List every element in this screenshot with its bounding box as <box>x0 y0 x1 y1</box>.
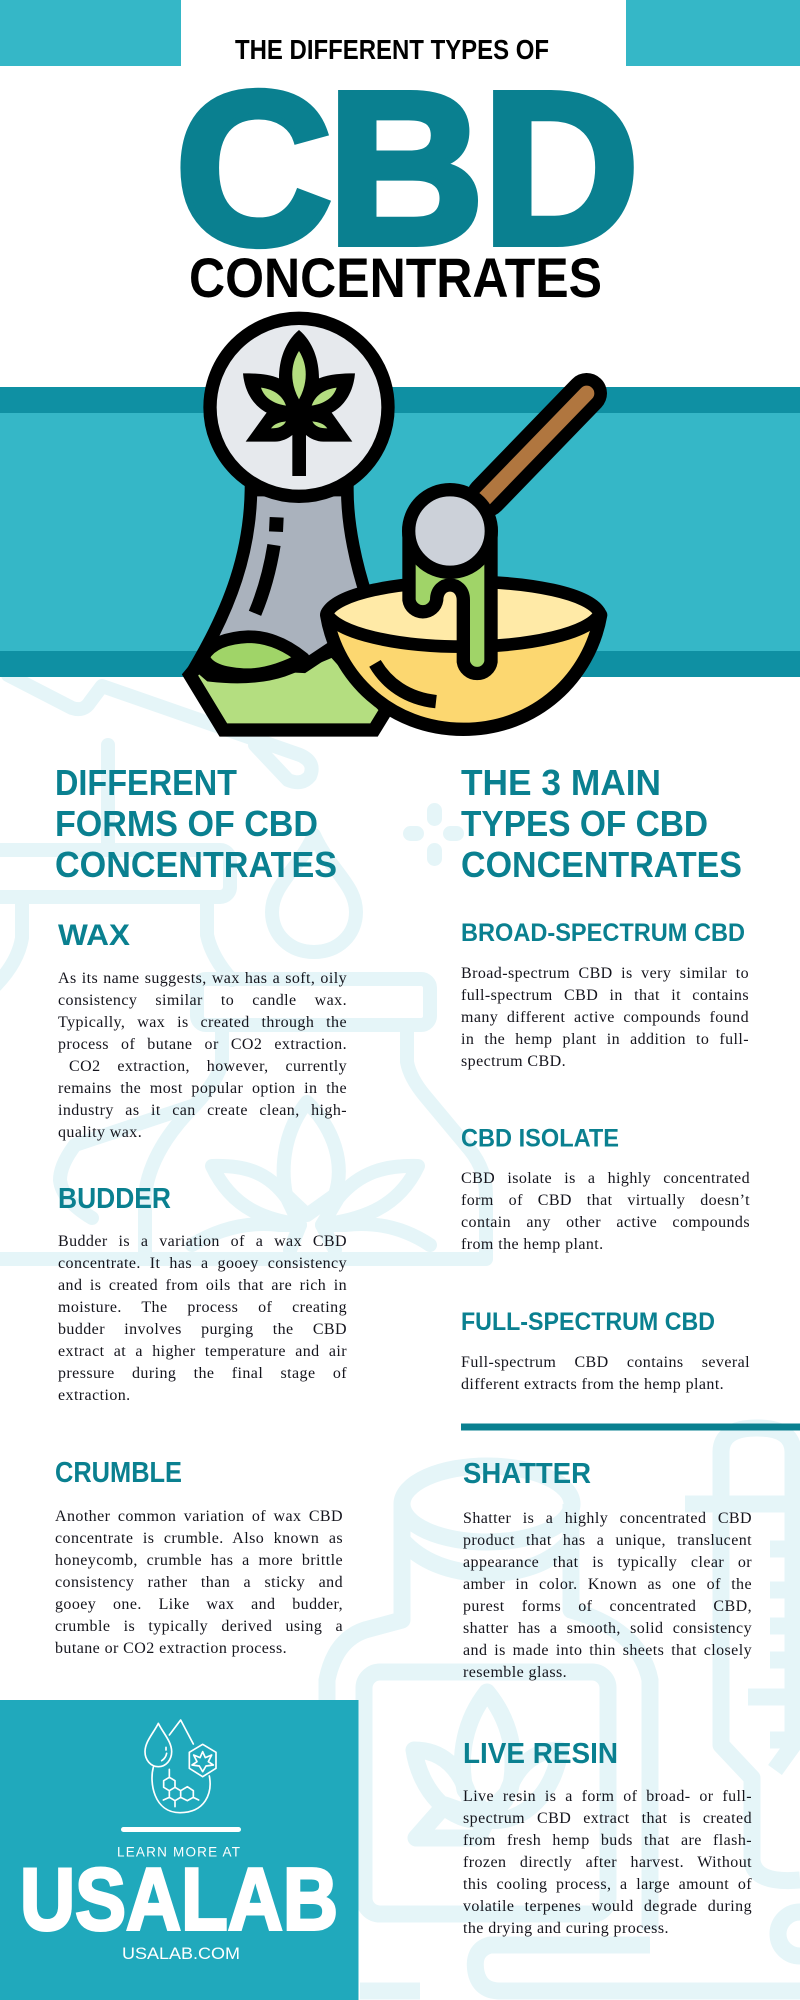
watermark: upper left dropper, bottles and leaf <box>0 675 486 1259</box>
text: wax: CO2 extraction, however, currently <box>69 1058 347 1075</box>
text: live resin: from fresh hemp buds that are flash- <box>463 1832 752 1849</box>
watermark: sparkle dots <box>403 803 464 866</box>
bowl <box>327 615 601 729</box>
text: crumble: Another common variation of wax CBD <box>55 1508 343 1525</box>
green puddle <box>203 637 303 675</box>
text: broad-spectrum <box>461 965 749 1070</box>
text: broad-spectrum: spectrum CBD. <box>461 1053 566 1070</box>
spoon head <box>409 490 491 572</box>
text: crumble <box>55 1508 343 1657</box>
text: broad-spectrum: full-spectrum CBD in that it contains <box>461 987 749 1004</box>
text: CBD isolate: contain any other active compounds <box>461 1214 750 1231</box>
subheading: CBD isolate: CBD ISOLATE <box>461 1124 619 1152</box>
header bar right <box>626 0 800 66</box>
grey neck <box>198 490 367 667</box>
text: broad-spectrum: many different active compounds found <box>461 1009 749 1026</box>
bowl highlight <box>375 663 436 702</box>
green drip <box>409 533 491 674</box>
text: budder: and is created from oils that are rich in <box>58 1277 347 1294</box>
heading: three main types: TYPES OF CBD <box>461 803 708 844</box>
heading: different forms: FORMS OF CBD <box>55 803 318 844</box>
subheading: crumble: CRUMBLE <box>55 1457 182 1489</box>
text: crumble: consistency rather than a sticky and <box>55 1574 343 1591</box>
spoon handle <box>487 393 587 497</box>
text: crumble: crumble is typically derived using a <box>55 1618 343 1635</box>
title: concentrates: CONCENTRATES <box>189 246 602 309</box>
rule <box>121 1827 241 1832</box>
text: live resin <box>463 1788 752 1937</box>
text: shatter: purest forms of concentrated CBD, <box>463 1598 752 1615</box>
subheading: wax: WAX <box>58 919 130 952</box>
illustration: leaf globe, CBD wax and spoon over bowl <box>190 318 601 730</box>
hero band <box>0 387 800 677</box>
text: full-spectrum: Full-spectrum CBD contains several <box>461 1354 750 1371</box>
subheading: shatter: SHATTER <box>463 1458 591 1490</box>
text: shatter <box>463 1510 752 1681</box>
neck highlights <box>255 517 298 532</box>
text: broad-spectrum: Broad-spectrum CBD is very similar to <box>461 965 749 982</box>
bowl rim <box>327 582 600 647</box>
text: budder: extract at a higher temperature and air <box>58 1343 347 1360</box>
divider bar <box>461 1424 800 1430</box>
globe with leaf <box>210 318 388 496</box>
text: shatter: Shatter is a highly concentrated CBD <box>463 1510 752 1527</box>
heading: three main types: CONCENTRATES <box>461 844 742 885</box>
text: shatter: resemble glass. <box>463 1664 567 1681</box>
header bar left <box>0 0 181 66</box>
text: budder: Budder is a variation of a wax CBD <box>58 1233 347 1250</box>
text: budder: pressure during the final stage of <box>58 1365 347 1382</box>
text: full-spectrum: different extracts from the hemp plant. <box>461 1376 724 1393</box>
text: budder: budder involves purging the CBD <box>58 1321 347 1338</box>
text: wax <box>58 970 347 1141</box>
watermark: lower right jar and dropper <box>327 1428 800 1991</box>
text: wax: quality wax. <box>58 1124 142 1141</box>
subheading: broad-spectrum: BROAD-SPECTRUM CBD <box>461 919 745 947</box>
text: budder: concentrate. It has a gooey consistency <box>58 1255 347 1272</box>
subheading: full-spectrum: FULL-SPECTRUM CBD <box>461 1308 715 1336</box>
text: crumble: gooey one. Like wax and budder, <box>55 1596 343 1613</box>
text: shatter: amber in color. Known as one of the <box>463 1576 752 1593</box>
green base <box>190 650 387 730</box>
text: wax: consistency similar to candle wax. <box>58 992 347 1009</box>
text: wax: industry as it can create clean, high- <box>58 1102 347 1119</box>
text: budder: moisture. The process of creating <box>58 1299 347 1316</box>
label: usalab.com: USALAB.COM <box>122 1944 240 1963</box>
text: shatter: appearance that is typically clear or <box>463 1554 752 1571</box>
text: wax: remains the most popular option in the <box>58 1080 347 1097</box>
heading: three main types <box>461 762 742 885</box>
text: live resin: this cooling process, a large amount of <box>463 1876 752 1893</box>
text: broad-spectrum: in the hemp plant in addition to full- <box>461 1031 749 1048</box>
label: learn more at: LEARN MORE AT <box>117 1844 240 1860</box>
heading: different forms: CONCENTRATES <box>55 844 337 885</box>
text: wax: Typically, wax is created through the <box>58 1014 347 1031</box>
logo: USALAB: USALAB <box>20 1850 338 1948</box>
subheading: budder: BUDDER <box>58 1183 171 1215</box>
text: shatter: shatter has a smooth, solid consistency <box>463 1620 752 1637</box>
heading: three main types: THE 3 MAIN <box>461 762 661 803</box>
text: shatter: and is made into thin sheets that closely <box>463 1642 752 1659</box>
title: the different types of: THE DIFFERENT TYPES OF <box>235 34 549 65</box>
text: shatter: product that has a unique, translucent <box>463 1532 752 1549</box>
text: live resin: frozen directly after harvest. Without <box>463 1854 752 1871</box>
text: crumble: honeycomb, crumble has a more brittle <box>55 1552 343 1569</box>
text: CBD isolate: form of CBD that virtually doesn’t <box>461 1192 750 1209</box>
icon: drops with molecule and leaf <box>145 1720 216 1813</box>
text: live resin: the drying and curing process. <box>463 1920 669 1937</box>
cannabis leaf <box>243 330 355 476</box>
heading: different forms: DIFFERENT <box>55 762 237 803</box>
panel: learn more <box>0 1700 358 2000</box>
subheading: live resin: LIVE RESIN <box>463 1738 618 1770</box>
text: live resin: volatile terpenes would degrade during <box>463 1898 752 1915</box>
title: CBD: CBD <box>175 48 639 290</box>
text: CBD isolate: from the hemp plant. <box>461 1236 604 1253</box>
heading: different forms <box>55 762 337 885</box>
text: budder <box>58 1233 347 1404</box>
text: live resin: Live resin is a form of broad- or full- <box>463 1788 752 1805</box>
text: CBD isolate <box>461 1170 750 1253</box>
text: live resin: spectrum CBD extract that is created <box>463 1810 752 1827</box>
text: budder: extraction. <box>58 1387 131 1404</box>
text: full-spectrum <box>461 1354 750 1393</box>
text: wax: process of butane or CO2 extraction. <box>58 1036 347 1053</box>
text: CBD isolate: CBD isolate is a highly concentrated <box>461 1170 750 1187</box>
text: wax: As its name suggests, wax has a soft, oily <box>58 970 347 987</box>
text: crumble: butane or CO2 extraction process. <box>55 1640 287 1657</box>
text: crumble: concentrate is crumble. Also known as <box>55 1530 343 1547</box>
